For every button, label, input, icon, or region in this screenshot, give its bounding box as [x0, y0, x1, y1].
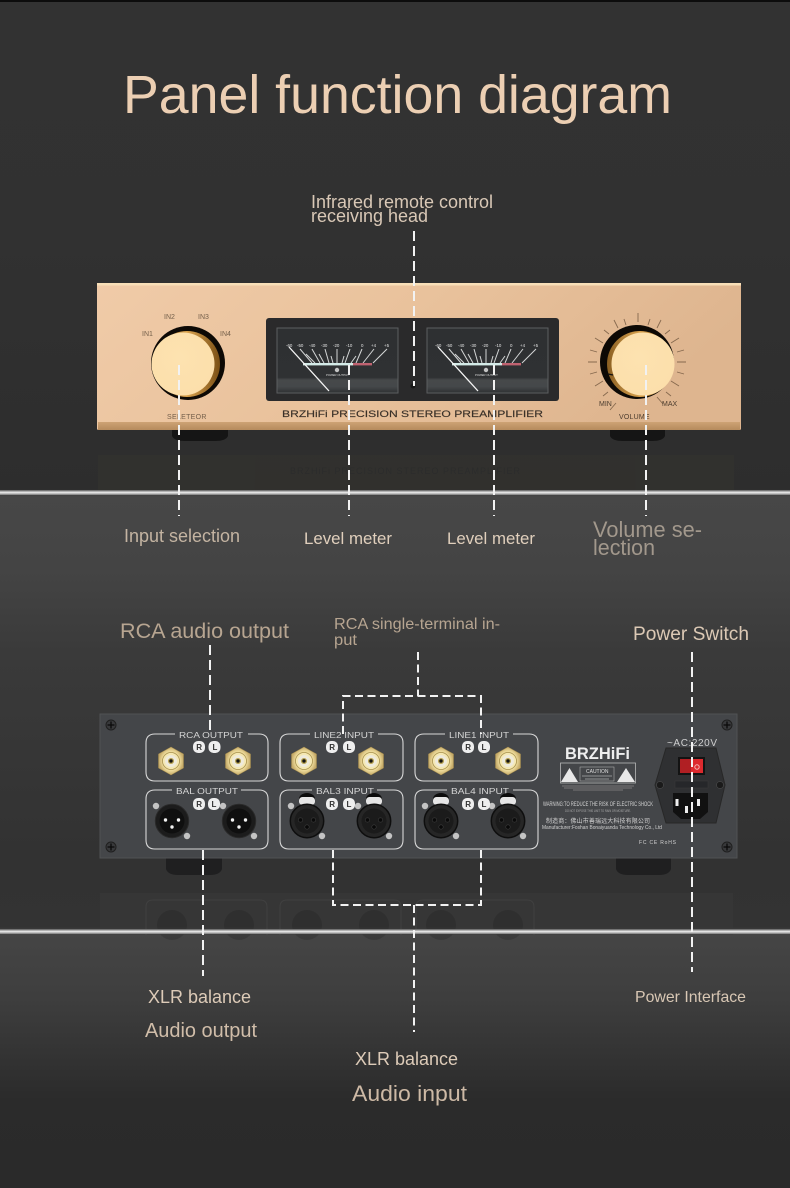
label: volume selection: Volume se-: [593, 517, 702, 542]
section: BAL4 input: L: [482, 800, 486, 809]
callout: power switch and interface leader line: [691, 652, 693, 972]
right VU meter: -60: [435, 343, 442, 348]
callout: right meter leader line: [493, 365, 495, 516]
selector labels: IN3: [198, 314, 209, 321]
AC voltage label: ~AC:220V: [667, 738, 717, 749]
label: infrared receiver: receiving head: [311, 206, 428, 226]
title: Panel function diagram: [123, 66, 672, 125]
section: LINE2 input: LINE2 INPUT: [314, 730, 375, 740]
volume labels: VOLUME: [619, 414, 650, 421]
selector knob: [151, 326, 225, 400]
callout: XLR input bracket: [333, 850, 481, 1032]
left VU meter: -10: [346, 343, 353, 348]
label: volume selection: lection: [593, 535, 655, 560]
volume labels: MIN: [599, 401, 612, 408]
label: XLR balance audio input: [352, 1049, 467, 1106]
right VU meter: -40: [458, 343, 465, 348]
rear chassis: [100, 714, 737, 858]
left VU meter: 0: [361, 343, 364, 348]
screws: [106, 720, 732, 852]
warning and manufacturer text: DO NOT EXPOSE THIS UNIT TO RAIN OR MOISTURE.: [565, 808, 631, 813]
label: XLR balance audio output: XLR balance: [148, 987, 251, 1007]
left VU meter: -40: [309, 343, 316, 348]
caution box: [560, 763, 636, 790]
label: infrared receiver: Infrared remote control: [311, 192, 493, 212]
divider shine lines: [0, 490, 790, 934]
feet: [172, 429, 665, 441]
label: XLR balance audio output: Audio output: [145, 1020, 257, 1042]
reflection: rear panel: [100, 893, 733, 940]
label: infrared receiver: [311, 192, 493, 226]
left VU meter: -30: [321, 343, 328, 348]
section: BAL4 input: [415, 786, 538, 849]
label: XLR balance audio output: [145, 987, 257, 1042]
section: LINE2 input: L: [346, 743, 352, 752]
right VU meter: +5: [533, 343, 539, 348]
left VU meter: -20: [333, 343, 340, 348]
section: BAL3 input: BAL3 INPUT: [316, 786, 375, 796]
model name: BRZHiFi PRECISION STEREO PREAMPLIFIER: [282, 409, 544, 419]
section: BAL4 input: BAL4 INPUT: [451, 786, 510, 796]
label: RCA single-terminal input: put: [334, 632, 358, 649]
label: XLR balance audio input: XLR balance: [355, 1049, 458, 1069]
section: RCA output: [146, 730, 268, 781]
callout: infrared leader line: [413, 231, 415, 386]
callout: RCA input bracket: [343, 652, 481, 734]
left VU meter: +5: [384, 343, 390, 348]
label: level meter right: Level meter: [447, 529, 535, 548]
section: RCA output: L: [212, 743, 218, 752]
section: BAL output: BAL OUTPUT: [176, 786, 239, 796]
section: BAL output: [146, 786, 268, 849]
volume labels: MAX: [662, 401, 678, 408]
warning and manufacturer text: FC CE RoHS: [639, 840, 677, 846]
infrared sensor: [410, 384, 416, 388]
left VU meter: POWER OUTPUT: [326, 373, 349, 377]
section: RCA output: RCA OUTPUT: [179, 730, 244, 740]
section: LINE2 input: R: [329, 743, 335, 752]
right VU meter: -20: [482, 343, 489, 348]
label: RCA single-terminal input: RCA single-terminal in-: [334, 616, 500, 633]
section: BAL4 input: R: [465, 800, 471, 809]
warning and manufacturer text: 制造商：佛山市善瑞远大科技有限公司: [546, 817, 650, 825]
section: LINE2 input: [280, 730, 403, 781]
section: LINE1 input: L: [482, 743, 486, 752]
warning and manufacturer text: [542, 801, 677, 846]
label: power switch: Power Switch: [633, 624, 749, 645]
label: volume selection: [593, 517, 702, 560]
warning and manufacturer text: Manufacturer:Foshan Bonaiyuanda Technology Co., Ltd: [542, 825, 662, 831]
callout: volume leader line: [645, 365, 647, 516]
selector labels: IN4: [220, 331, 231, 338]
label: XLR balance audio input: Audio input: [352, 1081, 467, 1106]
warning and manufacturer text: WARNING:TO REDUCE THE RISK OF ELECTRIC SHOCK: [543, 801, 654, 808]
section: BAL3 input: R: [329, 800, 335, 809]
callout: left meter leader line: [348, 365, 350, 516]
selector labels: IN2: [164, 314, 175, 321]
section: RCA output: R: [196, 743, 202, 752]
volume knob: [588, 313, 686, 410]
selector labels: [142, 314, 231, 421]
right VU meter: -10: [495, 343, 502, 348]
selector labels: SELETEOR: [167, 414, 207, 421]
right VU meter: [427, 328, 548, 393]
reflection: front panel: BRZHiFi PRECISION STEREO PREAMPLIFIER: [290, 466, 521, 476]
chassis: [97, 283, 741, 430]
label: level meter left: Level meter: [304, 529, 392, 548]
reflection: front panel: [98, 455, 734, 490]
label: RCA single-terminal input: [334, 616, 500, 649]
meter housing: [266, 318, 559, 401]
label: RCA audio output: RCA audio output: [120, 620, 289, 643]
caution box: CAUTION: [586, 769, 609, 775]
section: BAL output: R: [196, 800, 202, 809]
volume labels: [599, 401, 678, 421]
left VU meter: -60: [286, 343, 293, 348]
left VU meter: +4: [371, 343, 377, 348]
section: LINE1 input: LINE1 INPUT: [449, 730, 510, 740]
selector labels: IN1: [142, 331, 153, 338]
callout: RCA output leader line: [209, 645, 211, 732]
section: LINE1 input: [415, 730, 538, 781]
label: power interface: Power Interface: [635, 989, 746, 1006]
rear feet: [166, 858, 671, 875]
right VU meter: -50: [446, 343, 453, 348]
left VU meter: -50: [297, 343, 304, 348]
top edge bar: [0, 0, 790, 2]
power module: [655, 748, 725, 823]
section: BAL output: L: [212, 800, 216, 809]
label: input selection: Input selection: [124, 526, 240, 546]
section: BAL3 input: L: [346, 800, 352, 809]
left VU meter: [277, 328, 398, 393]
right VU meter: -30: [470, 343, 477, 348]
right VU meter: 0: [510, 343, 513, 348]
right VU meter: POWER OUTPUT: [475, 373, 498, 377]
front panel device: [97, 283, 741, 441]
section: BAL3 input: [280, 786, 403, 849]
right VU meter: +4: [520, 343, 526, 348]
callout: input selection leader line: [178, 365, 180, 516]
section: LINE1 input: R: [465, 743, 471, 752]
rear panel device: [100, 714, 737, 875]
callout: XLR output leader line: [202, 850, 204, 976]
brand logo: BRZHiFi: [565, 744, 630, 763]
